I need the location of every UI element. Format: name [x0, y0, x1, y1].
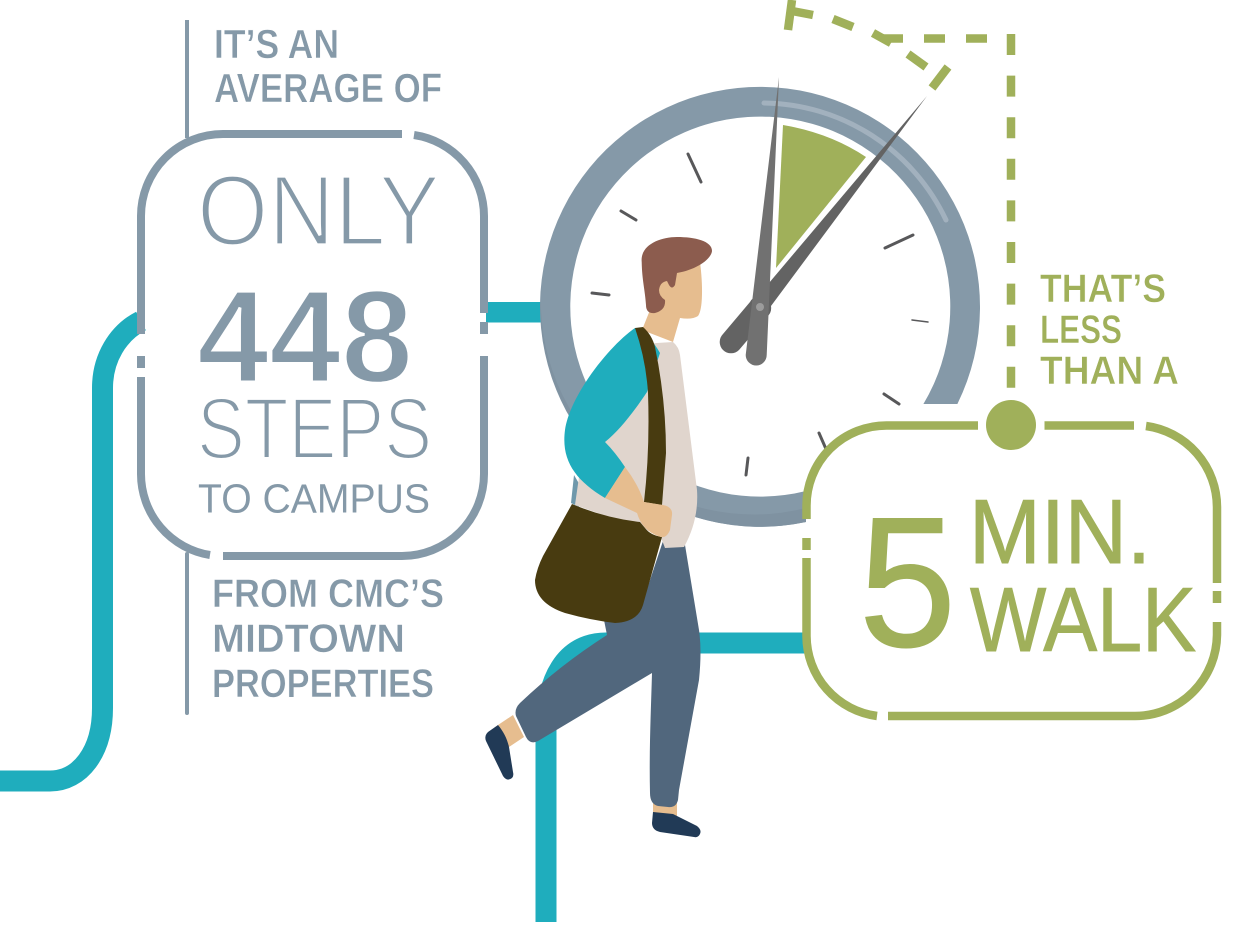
text: that's less than a: LESS [1040, 308, 1122, 352]
vertical rule: upper [185, 20, 189, 138]
text: walk: WALK [970, 570, 1196, 671]
ring shadow [540, 285, 806, 527]
text: 5: 5 [859, 480, 956, 686]
text: that's less than a [1040, 267, 1179, 393]
clock ticks [592, 154, 928, 475]
vertical rule: lower [185, 552, 189, 715]
forearm and hand [605, 467, 672, 537]
text: it's an average of: AVERAGE OF [214, 65, 442, 111]
text: it's an average of [214, 21, 442, 111]
green node dot [986, 400, 1036, 450]
text: min.: MIN. [969, 482, 1151, 583]
teal path: lower route [546, 643, 806, 922]
neck and face [642, 260, 702, 342]
clock hand: light [746, 77, 779, 366]
bag [535, 504, 662, 623]
left sock [498, 715, 524, 747]
right sock [653, 800, 677, 816]
hair [642, 237, 712, 313]
text: it's an average of: IT’S AN [214, 21, 339, 67]
walking person [485, 237, 712, 837]
left shoe [485, 725, 513, 780]
trousers [516, 538, 700, 807]
clock pivot screw [756, 303, 764, 311]
text: from cmc's midtown properties [212, 572, 444, 706]
grey rounded box [141, 134, 484, 556]
green rounded box [806, 425, 1217, 716]
bag strap [635, 327, 666, 505]
clock [540, 77, 980, 527]
ring highlight [764, 103, 946, 220]
teal connector: box to clock [486, 302, 542, 322]
text: only: ONLY [197, 155, 440, 267]
text: from cmc's midtown properties: PROPERTIES [212, 662, 434, 706]
shirt [575, 342, 697, 548]
back shadow [571, 475, 581, 507]
text: that's less than a: THAN A [1040, 349, 1179, 393]
text: to campus: TO CAMPUS [198, 476, 430, 522]
dashed green route [788, 0, 1011, 390]
clock ring [540, 87, 980, 527]
teal path: left route [0, 321, 141, 781]
teal sleeve [564, 328, 660, 498]
clock hand: dark [720, 96, 927, 353]
right shoe [652, 812, 701, 837]
text: steps: STEPS [197, 380, 432, 478]
text: from cmc's midtown properties: MIDTOWN [212, 617, 405, 661]
text: 448: 448 [197, 263, 413, 410]
text: from cmc's midtown properties: FROM CMC’S [212, 572, 444, 616]
text: that's less than a: THAT’S [1040, 267, 1166, 311]
green five-minute wedge [776, 125, 866, 268]
